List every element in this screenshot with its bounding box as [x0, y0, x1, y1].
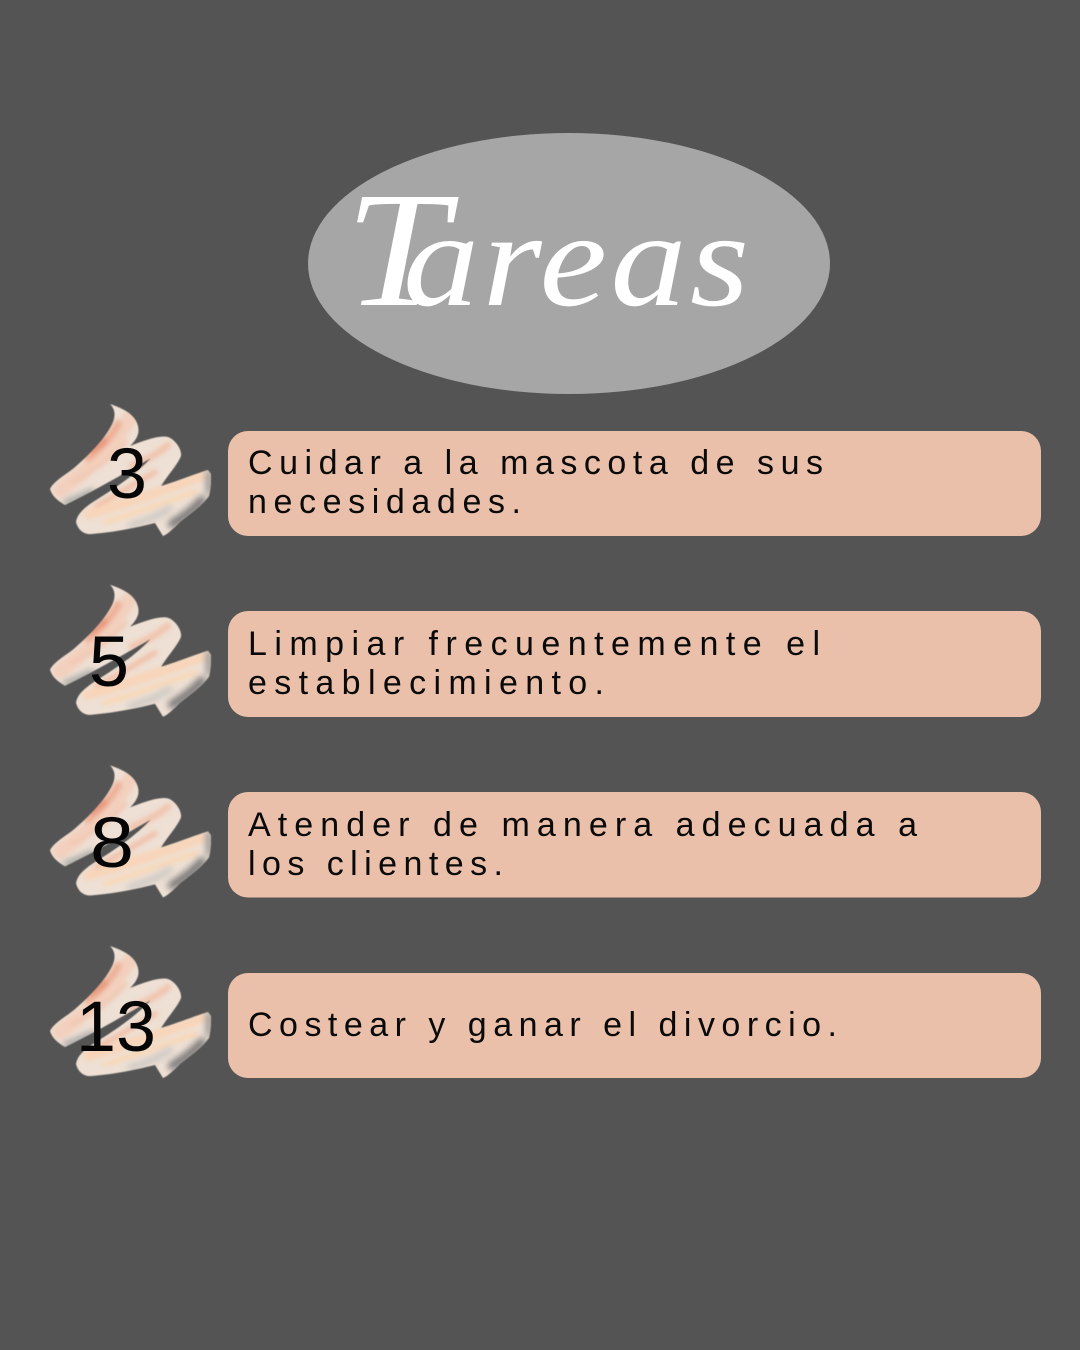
icon: brush stroke with number 5: [40, 576, 220, 726]
icon: brush stroke with number 3: [40, 395, 220, 545]
task card 3: [228, 792, 1041, 898]
title oval: [308, 133, 830, 394]
icon: brush stroke with number 8: 8: [90, 804, 134, 883]
icon: brush stroke with number 13: [40, 937, 220, 1087]
task card 4: Costear y ganar el divorcio.: [248, 1006, 837, 1044]
title badge: [308, 133, 830, 394]
icon: brush stroke with number 8: [40, 756, 220, 906]
icon: brush stroke with number 3: 3: [107, 435, 147, 514]
task card 3: Atender de manera adecuada a: [248, 806, 917, 844]
task card 1: necesidades.: [248, 483, 521, 521]
task card 1: [228, 431, 1041, 536]
task card 2: Limpiar frecuentemente el: [248, 625, 820, 663]
task card 4: [228, 973, 1041, 1078]
row 2: [40, 576, 1041, 726]
icon: brush stroke with number 5: 5: [89, 623, 129, 702]
task card 1: Cuidar a la mascota de sus: [248, 444, 823, 482]
row 3: [40, 756, 1041, 906]
row 4: [40, 937, 1041, 1087]
title: Tareas: [345, 158, 753, 341]
icon: brush stroke with number 13: 13: [76, 988, 156, 1067]
row 1: [40, 395, 1041, 545]
task card 3: los clientes.: [248, 845, 503, 883]
task card 2: [228, 611, 1041, 717]
task card 2: establecimiento.: [248, 664, 604, 702]
